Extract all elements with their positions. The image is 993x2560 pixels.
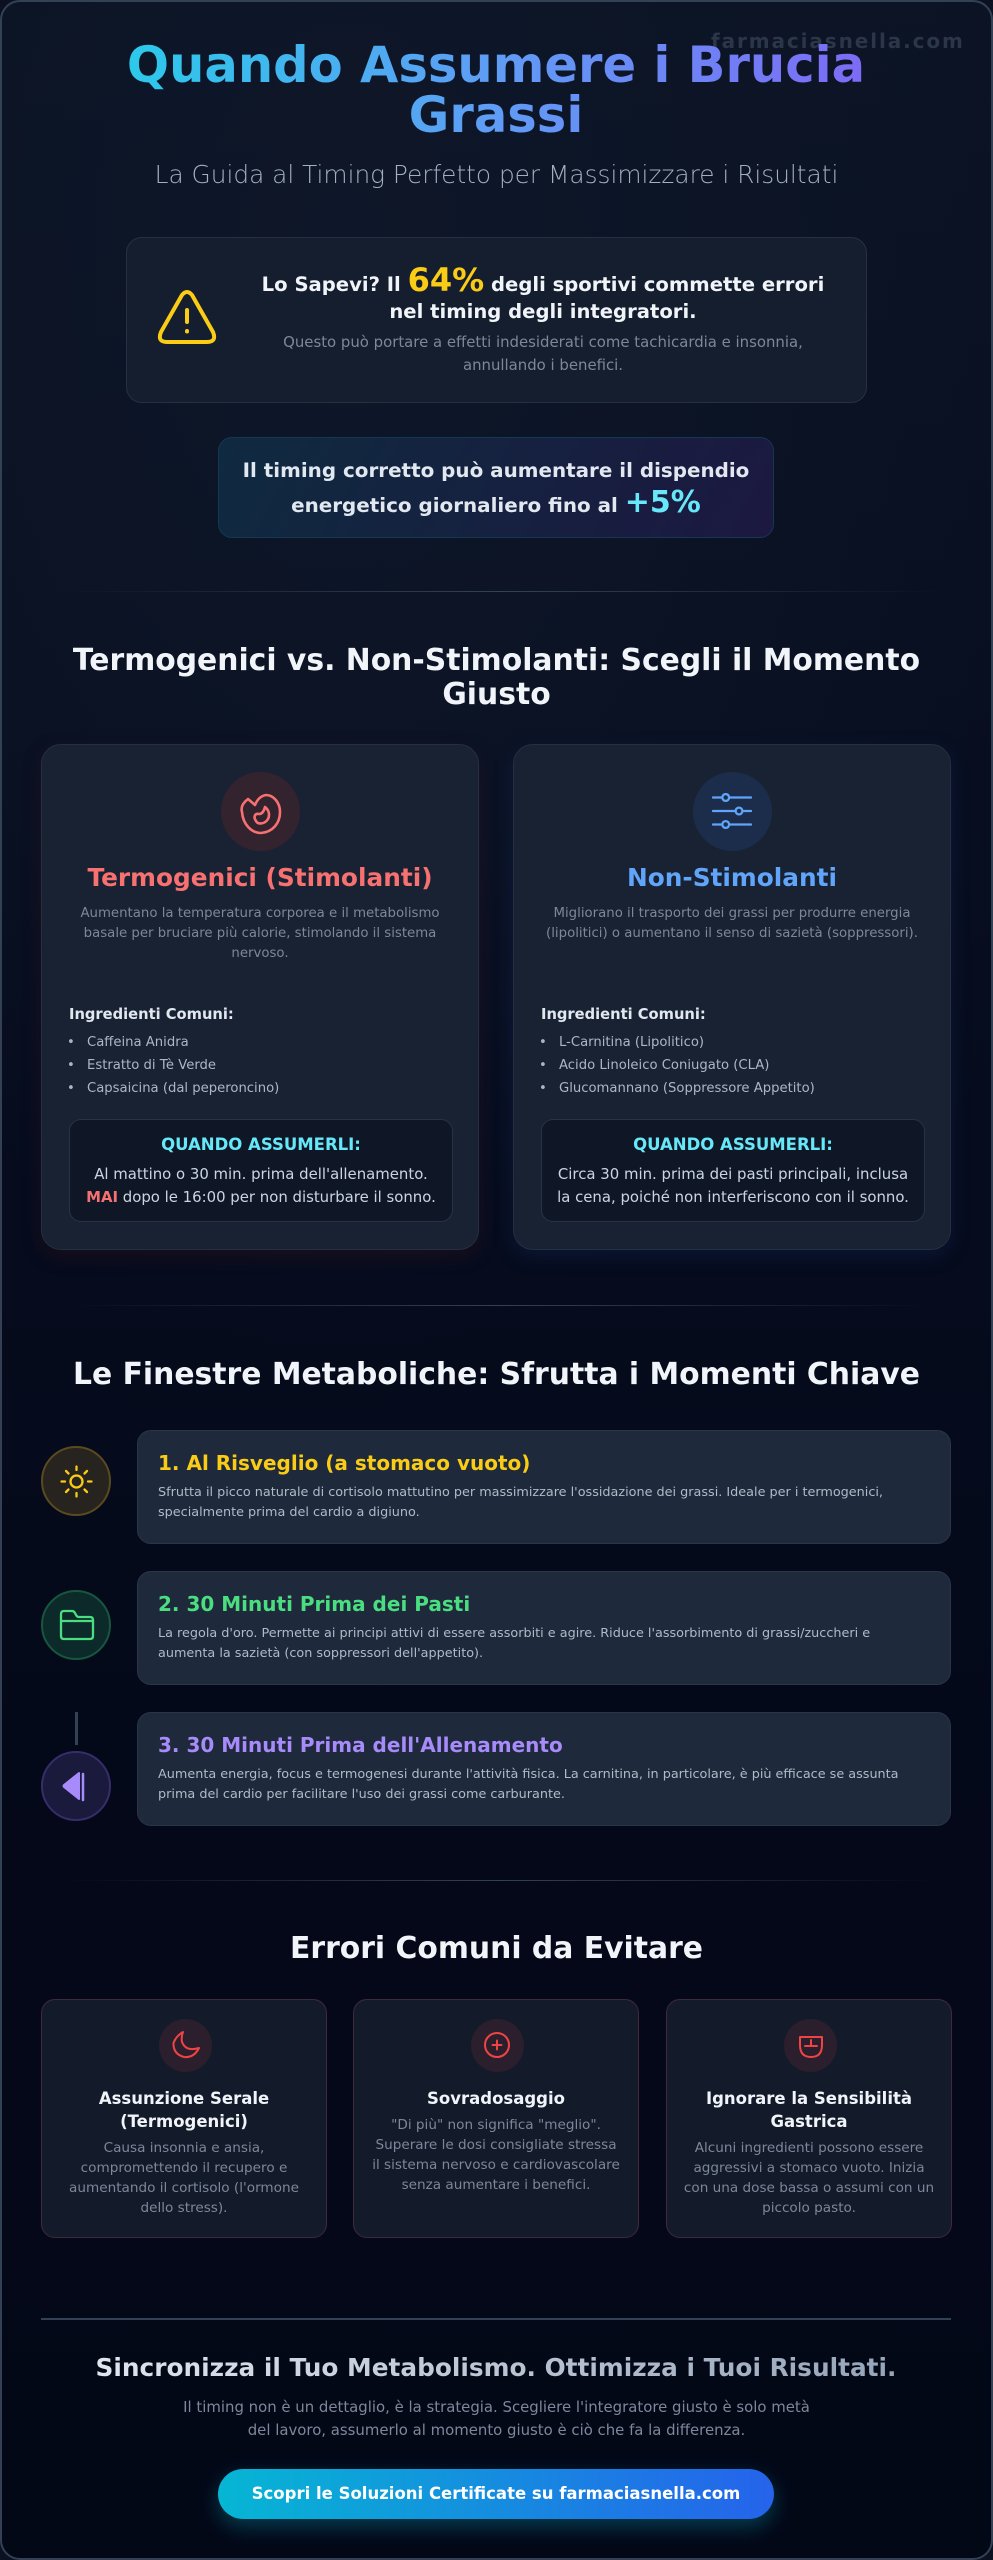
icon: folder (41, 1590, 111, 1660)
heading: comparison: Termogenici vs. Non-Stimolanti: Scegli il Momento (73, 643, 920, 678)
icon: rewind (41, 1751, 111, 1821)
card description: Aumentano la temperatura corporea e il metabolismo (80, 906, 440, 921)
when to take (69, 1119, 453, 1222)
ingredient list: Capsaicina (dal peperoncino) (87, 1081, 279, 1096)
error description (372, 2117, 620, 2193)
icon: bowl (784, 2019, 837, 2072)
ingredient list: • (67, 1081, 75, 1096)
step 3: Aumenta energia, focus e termogenesi durante l'attività fisica. La carnitina, in particolare, è più efficace se assunta (158, 1767, 899, 1782)
footer text: del lavoro, assumerlo al momento giusto è ciò che fa la differenza. (248, 2421, 745, 2439)
error card: gastric sensitivity (666, 1999, 952, 2238)
step 2: La regola d'oro. Permette ai principi attivi di essere assorbiti e agire. Riduce l'assorbimento di grassi/zuccheri e (158, 1626, 870, 1641)
when to take: QUANDO ASSUMERLI: (633, 1135, 833, 1154)
callout text (243, 459, 749, 520)
card description (80, 906, 440, 961)
footer text: Il timing non è un dettaglio, è la strategia. Scegliere l'integratore giusto è solo metà (183, 2398, 810, 2416)
error description: piccolo pasto. (762, 2200, 856, 2216)
watermark: farmaciasnella.com (711, 29, 965, 53)
heading: metabolic windows: Le Finestre Metaboliche: Sfrutta i Momenti Chiave (73, 1357, 920, 1392)
footer heading: Sincronizza il Tuo Metabolismo. Ottimizza i Tuoi Risultati. (96, 2353, 896, 2382)
ingredient list: Glucomannano (Soppressore Appetito) (559, 1081, 815, 1096)
error card: evening intake (41, 1999, 327, 2238)
card description: (lipolitici) o aumentano il senso di sazietà (soppressori). (546, 926, 918, 941)
title: Quando Assumere i Brucia (127, 36, 865, 94)
error description: senza aumentare i benefici. (402, 2177, 590, 2193)
stat explanation: Questo può portare a effetti indesiderati come tachicardia e insonnia, (283, 333, 803, 351)
ingredient list: Estratto di Tè Verde (87, 1058, 216, 1073)
error card: overdose (353, 1999, 639, 2238)
ingredient list: • (539, 1081, 547, 1096)
icon: flame (221, 772, 300, 851)
step 1: 1. Al Risveglio (a stomaco vuoto) (158, 1451, 530, 1475)
stat text (262, 261, 824, 323)
card description: nervoso. (231, 946, 289, 961)
button: Scopri le Soluzioni Certificate su farmaciasnella.com (252, 2484, 740, 2503)
when to take: QUANDO ASSUMERLI: (161, 1135, 361, 1154)
step 3 (137, 1712, 951, 1826)
error description: Superare le dosi consigliate stressa (375, 2137, 617, 2153)
step 1: specialmente prima del cardio a digiuno. (158, 1505, 420, 1520)
step 2: 2. 30 Minuti Prima dei Pasti (158, 1592, 470, 1616)
when to take: Al mattino o 30 min. prima dell'allenamento. (94, 1164, 428, 1182)
ingredient list: Ingredienti Comuni: (69, 1006, 234, 1023)
error description (684, 2140, 934, 2216)
panel: non-stimolanti (513, 744, 951, 1250)
ingredient list (67, 1006, 279, 1096)
when to take: la cena, poiché non interferiscono con il sonno. (557, 1188, 909, 1206)
when to take: MAI dopo le 16:00 per non disturbare il sonno. (86, 1188, 436, 1206)
step 2 (137, 1571, 951, 1685)
error title: Gastrica (770, 2112, 848, 2131)
error description: Alcuni ingredienti possono essere (695, 2140, 923, 2156)
when to take (541, 1119, 925, 1222)
card title: Termogenici (Stimolanti) (87, 863, 433, 892)
button (218, 2469, 774, 2519)
card description (546, 906, 918, 941)
error description: compromettendo il recupero e (81, 2160, 287, 2176)
stat explanation: annullando i benefici. (463, 356, 623, 374)
ingredient list: Caffeina Anidra (87, 1035, 189, 1050)
error title: Assunzione Serale (99, 2089, 269, 2108)
heading: common errors: Errori Comuni da Evitare (290, 1931, 703, 1966)
stat text: Lo Sapevi? Il 64% degli sportivi commette errori (262, 261, 824, 299)
error description: con una dose bassa o assumi con un (684, 2180, 934, 2196)
title: Grassi (409, 86, 583, 144)
ingredient list: • (67, 1058, 75, 1073)
error title (706, 2089, 912, 2131)
icon: sun (41, 1446, 111, 1516)
error description: aumentando il cortisolo (l'ormone (69, 2180, 299, 2196)
title (108, 40, 884, 140)
error description: il sistema nervoso e cardiovascolare (372, 2157, 620, 2173)
ingredient list: • (539, 1035, 547, 1050)
callout: energy expenditure (218, 437, 774, 538)
card title: Non-Stimolanti (627, 863, 837, 892)
ingredient list (539, 1006, 815, 1096)
step 1: Sfrutta il picco naturale di cortisolo mattutino per massimizzare l'ossidazione dei grassi. Ideale per i termogenici, (158, 1485, 883, 1500)
icon: warning triangle (158, 290, 216, 344)
connector (75, 1712, 78, 1745)
step 3: prima del cardio per facilitare l'uso dei grassi come carburante. (158, 1787, 565, 1802)
error title (99, 2089, 269, 2131)
stat text: nel timing degli integratori. (389, 300, 697, 323)
panel: did you know (126, 237, 867, 403)
ingredient list: L-Carnitina (Lipolitico) (559, 1035, 704, 1050)
ingredient list: • (539, 1058, 547, 1073)
icon: moon (159, 2019, 212, 2072)
stat explanation (283, 333, 803, 374)
ingredient list: Acido Linoleico Coniugato (CLA) (559, 1058, 769, 1073)
error description: "Di più" non significa "meglio". (391, 2117, 601, 2133)
when to take: Circa 30 min. prima dei pasti principali, inclusa (558, 1164, 908, 1182)
error description (69, 2140, 299, 2216)
icon: plus circle (471, 2019, 524, 2072)
error description: aggressivi a stomaco vuoto. Inizia (693, 2160, 925, 2176)
footer text (183, 2398, 810, 2439)
error title: (Termogenici) (120, 2112, 248, 2131)
step 3: 3. 30 Minuti Prima dell'Allenamento (158, 1733, 563, 1757)
error title: Ignorare la Sensibilità (706, 2089, 912, 2108)
callout text: energetico giornaliero fino al +5% (291, 485, 701, 520)
heading: comparison: Giusto (442, 677, 551, 712)
callout text: Il timing corretto può aumentare il dispendio (243, 459, 749, 482)
card description: Migliorano il trasporto dei grassi per produrre energia (554, 906, 910, 921)
error description: Causa insonnia e ansia, (104, 2140, 264, 2156)
card description: basale per bruciare più calorie, stimolando il sistema (84, 926, 436, 941)
error description: dello stress). (140, 2200, 228, 2216)
ingredient list: Ingredienti Comuni: (541, 1006, 706, 1023)
icon: sliders (693, 772, 772, 851)
error title: Sovradosaggio (427, 2089, 565, 2108)
heading: comparison (73, 643, 920, 712)
ingredient list: • (67, 1035, 75, 1050)
step 1 (137, 1430, 951, 1544)
step 2: aumenta la sazietà (con soppressori dell'appetito). (158, 1646, 483, 1661)
subtitle: La Guida al Timing Perfetto per Massimizzare i Risultati (155, 160, 838, 189)
panel: termogenici (41, 744, 479, 1250)
